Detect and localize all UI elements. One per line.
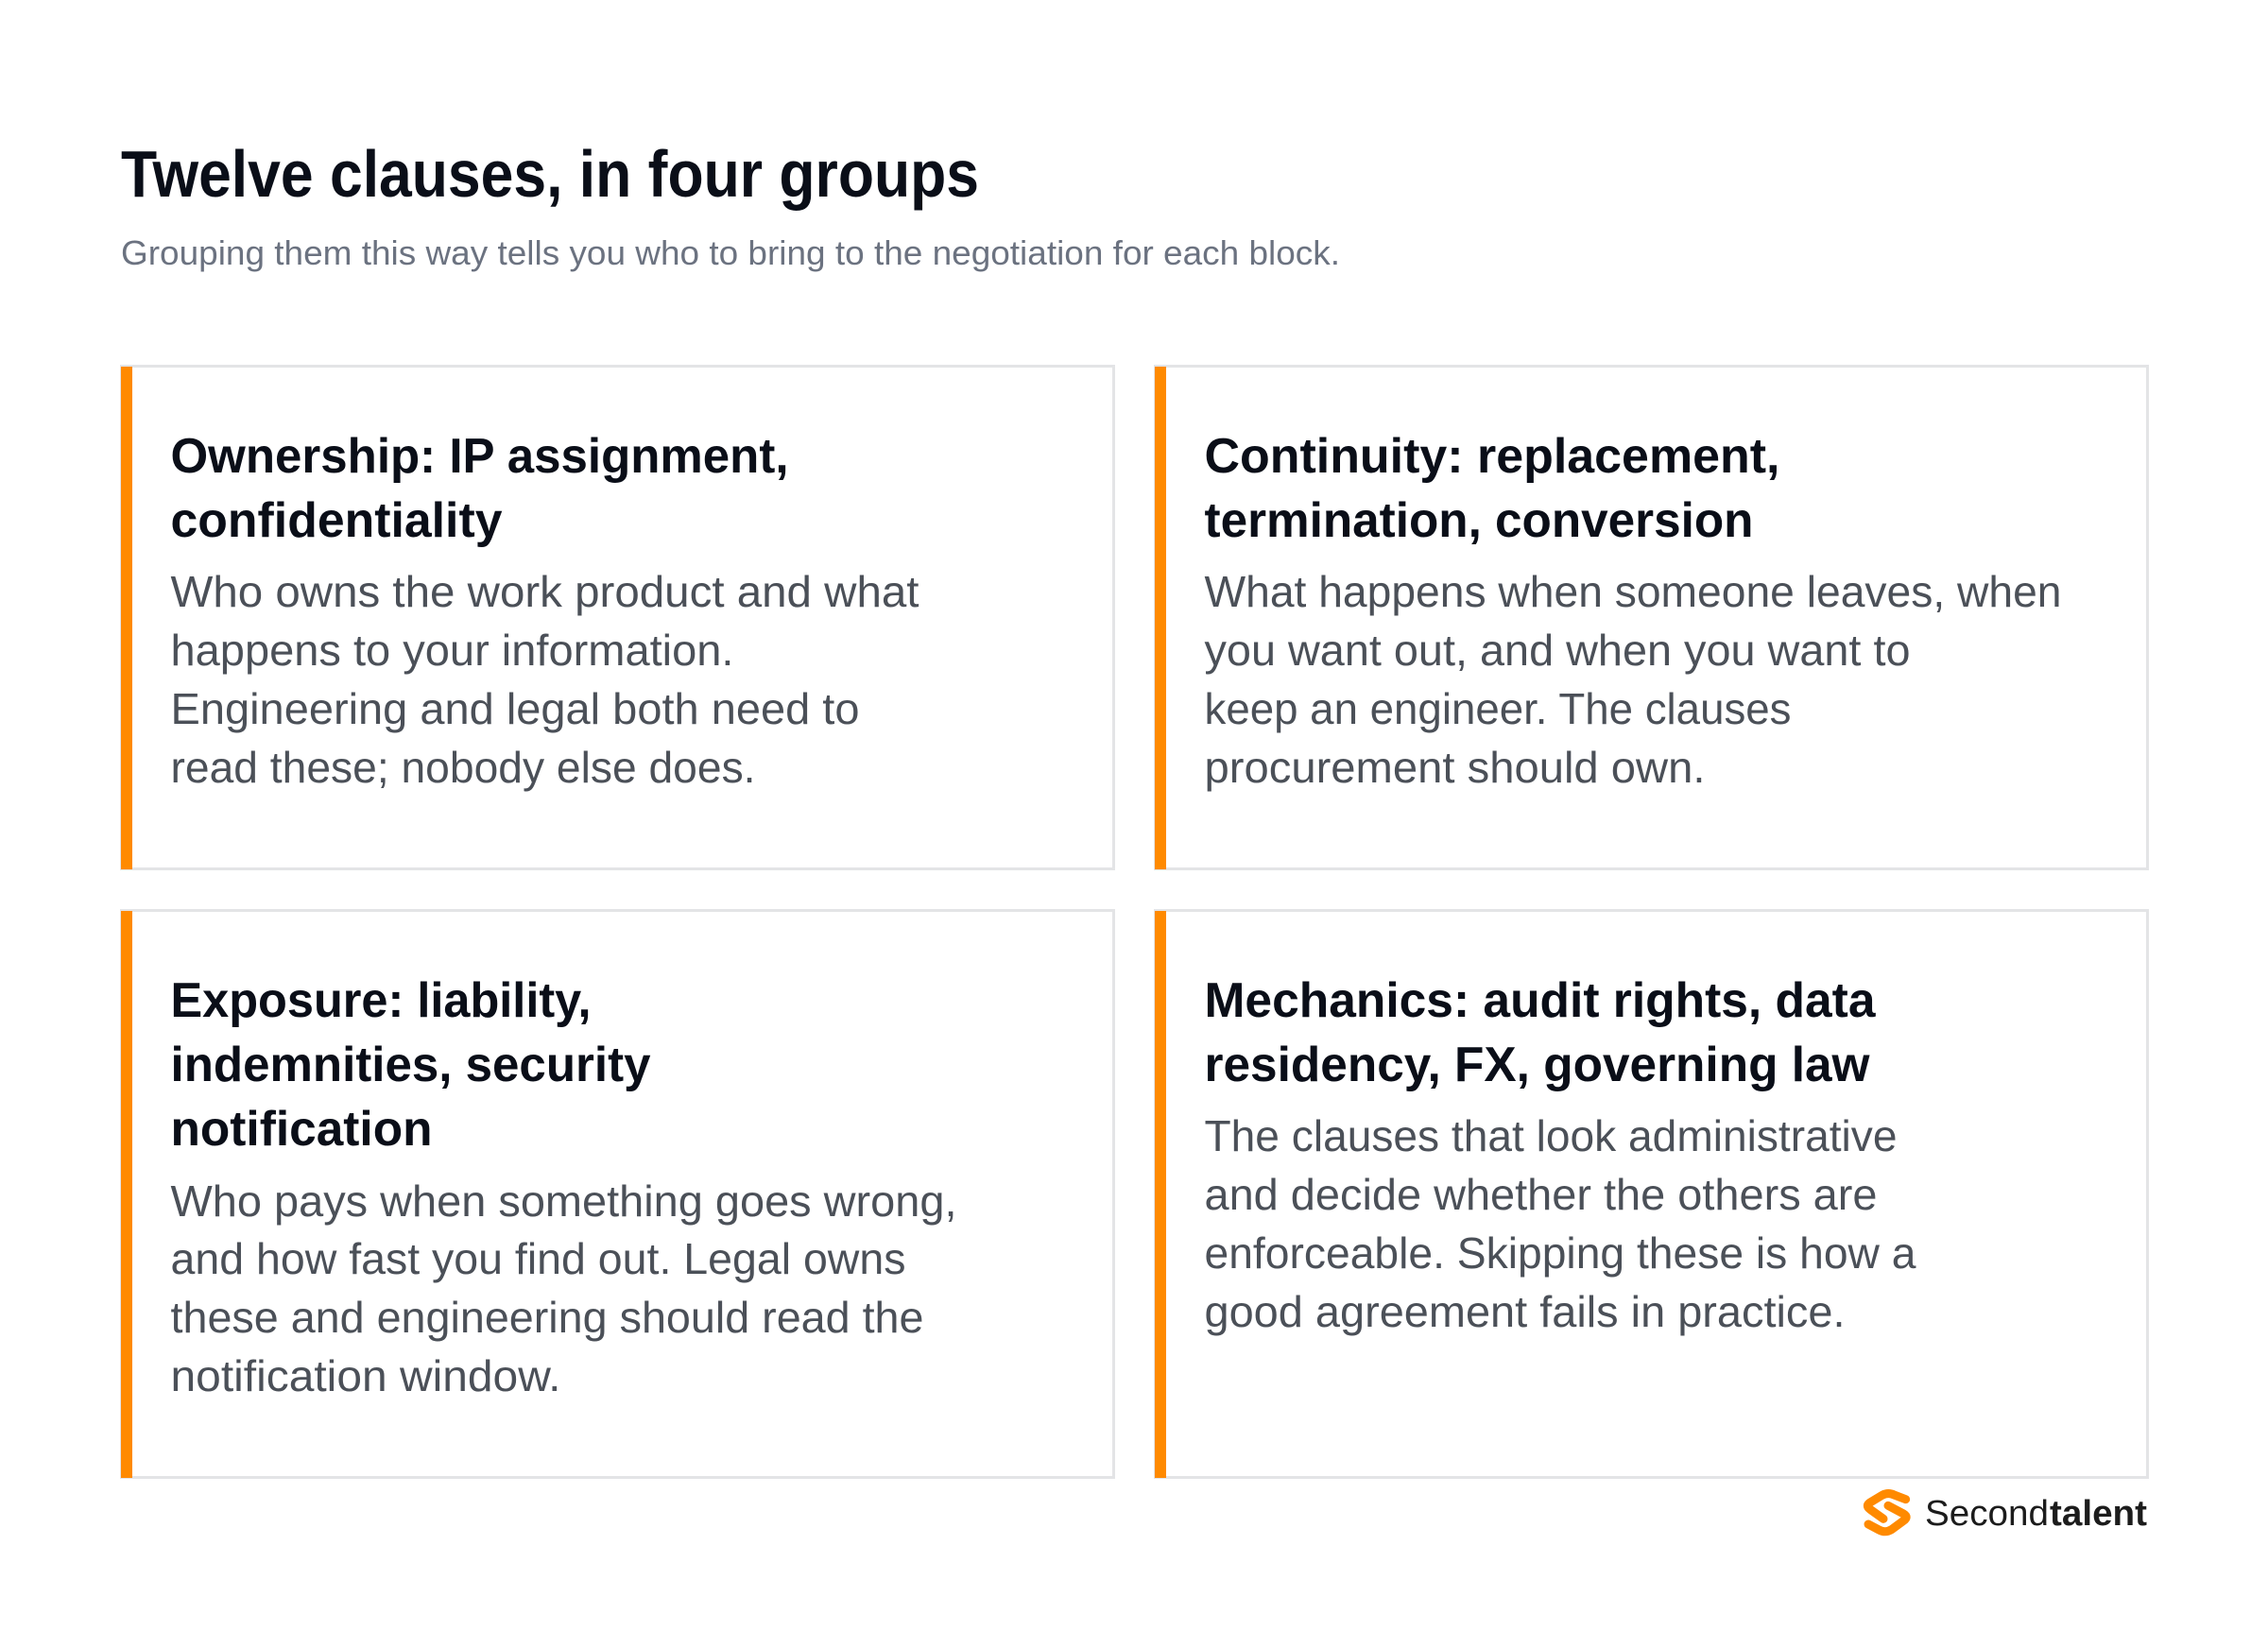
- body: ownership: Engineering and legal both need to: [170, 684, 860, 733]
- heading: continuity: termination, conversion: [1204, 493, 1754, 548]
- title: Twelve clauses, in four groups: [121, 137, 979, 211]
- heading: continuity: [1204, 429, 1780, 548]
- body: mechanics: enforceable. Skipping these is how a: [1204, 1228, 1916, 1278]
- panel: exposure: [121, 911, 1113, 1478]
- icon: logo mark: [1867, 1494, 1906, 1532]
- body: mechanics: and decide whether the others are: [1204, 1170, 1877, 1219]
- body: mechanics: The clauses that look administrative: [1204, 1111, 1898, 1160]
- body: ownership: Who owns the work product and what: [170, 567, 919, 616]
- body: mechanics: [1204, 1111, 1916, 1336]
- body: continuity: procurement should own.: [1204, 743, 1705, 792]
- body: ownership: happens to your information.: [170, 626, 733, 675]
- body: continuity: keep an engineer. The clauses: [1204, 684, 1792, 733]
- subtitle: Grouping them this way tells you who to bring to the negotiation for each block.: [121, 233, 1340, 272]
- panel: mechanics: [1155, 911, 2147, 1478]
- accent bar: exposure: [121, 911, 132, 1478]
- body: mechanics: good agreement fails in practice.: [1204, 1287, 1845, 1336]
- heading: continuity: Continuity: replacement,: [1204, 429, 1780, 484]
- heading: exposure: Exposure: liability,: [170, 973, 592, 1028]
- heading: ownership: Ownership: IP assignment,: [170, 429, 788, 484]
- accent bar: continuity: [1155, 367, 1166, 869]
- panel: ownership: [121, 367, 1113, 869]
- accent bar: ownership: [121, 367, 132, 869]
- body: exposure: [170, 1176, 956, 1400]
- heading: exposure: notification: [170, 1102, 433, 1157]
- logo: Secondtalent: [1867, 1494, 2147, 1534]
- heading: mechanics: [1204, 973, 1877, 1092]
- heading: ownership: [170, 429, 788, 548]
- body: ownership: [170, 567, 919, 792]
- wordmark: Second: [1925, 1494, 2049, 1534]
- body: exposure: these and engineering should read the: [170, 1293, 924, 1342]
- logo: Secondtalent: talent: [2050, 1494, 2147, 1534]
- heading: exposure: indemnities, security: [170, 1038, 651, 1092]
- body: exposure: and how fast you find out. Legal owns: [170, 1234, 905, 1283]
- heading: mechanics: residency, FX, governing law: [1204, 1038, 1870, 1092]
- panel: continuity: [1155, 367, 2147, 869]
- body: continuity: What happens when someone leaves, when: [1204, 567, 2062, 616]
- body: exposure: notification window.: [170, 1351, 561, 1400]
- body: continuity: [1204, 567, 2062, 792]
- body: exposure: Who pays when something goes wrong,: [170, 1176, 956, 1226]
- heading: ownership: confidentiality: [170, 493, 503, 548]
- body: ownership: read these; nobody else does.: [170, 743, 756, 792]
- heading: mechanics: Mechanics: audit rights, data: [1204, 973, 1877, 1028]
- accent bar: mechanics: [1155, 911, 1166, 1478]
- body: continuity: you want out, and when you want to: [1204, 626, 1911, 675]
- heading: exposure: [170, 973, 651, 1157]
